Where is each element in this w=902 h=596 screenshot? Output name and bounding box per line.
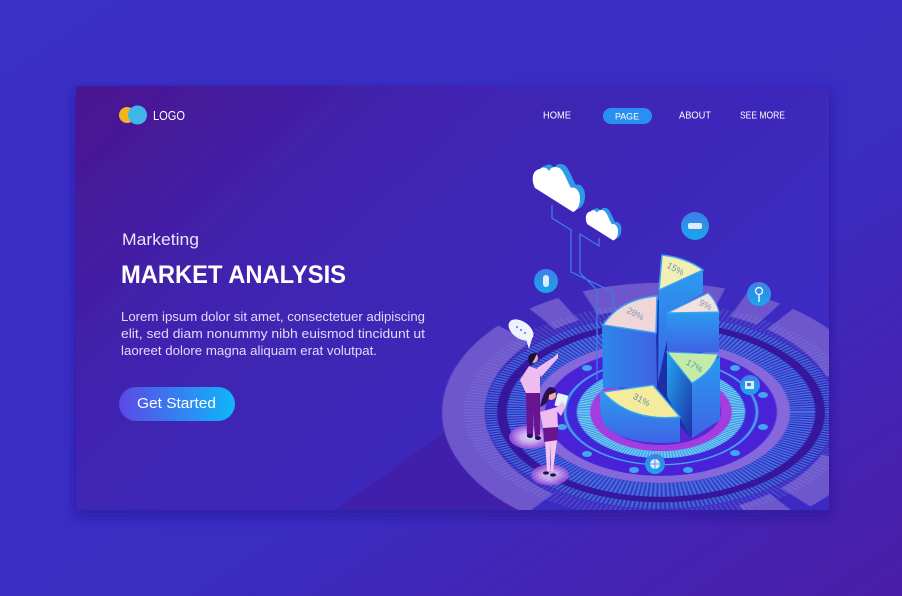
- title: MARKET ANALYSIS: [121, 261, 346, 289]
- pie chart: 9% slice: [667, 293, 719, 352]
- pie chart: 15% slice: 15%: [665, 260, 686, 278]
- button: get started: [119, 387, 235, 421]
- spotlight under man: [509, 425, 546, 449]
- navigation: [543, 108, 785, 124]
- body text: Lorem ipsum dolor sit amet, consectetuer adipiscing: [121, 310, 425, 324]
- pie chart: 17% slice: 17%: [684, 357, 705, 375]
- icon: mouse: [534, 269, 558, 293]
- pie chart: 28% slice: [602, 296, 657, 388]
- button: get started: Get Started: [137, 395, 216, 412]
- active nav pill: PAGE: [615, 112, 639, 122]
- panel: landing page card: [76, 86, 829, 510]
- circuit lines from clouds: [552, 205, 613, 380]
- body text: [121, 310, 426, 358]
- icon: small cloud: [586, 208, 621, 241]
- navigation: ABOUT: [679, 110, 711, 122]
- subheading: Marketing: [122, 231, 199, 249]
- icon: globe: [645, 454, 665, 474]
- icon: magnifier: [747, 282, 771, 306]
- ring dots: [557, 365, 768, 473]
- logo: [119, 106, 185, 124]
- navigation: HOME: [543, 110, 571, 122]
- logo: LOGO: [153, 109, 185, 123]
- icon: megaphone: [681, 212, 709, 240]
- body text: elit, sed diam nonummy nibh euismod tincidunt ut: [121, 327, 426, 341]
- speech bubble: [508, 319, 534, 349]
- pie chart: 9% slice: 9%: [697, 297, 714, 312]
- pie chart: 17% slice: [667, 352, 720, 438]
- icon: large cloud: [533, 164, 585, 212]
- active nav pill: [603, 108, 652, 124]
- outer segmented ring: [464, 295, 858, 529]
- figure: woman: [540, 387, 568, 477]
- concentric data rings: [474, 309, 848, 515]
- pie chart: shadow core: [655, 300, 692, 440]
- pie chart: 28% slice: 28%: [625, 305, 646, 323]
- figure: man: [520, 353, 558, 440]
- pie chart: 15% slice: [658, 255, 703, 383]
- spotlight under woman: [531, 464, 569, 486]
- icon: video: [740, 375, 760, 395]
- pie chart: 31% slice: [600, 385, 680, 443]
- illustration: isometric market analysis scene: [336, 164, 829, 510]
- navigation: SEE MORE: [740, 110, 785, 122]
- body text: laoreet dolore magna aliquam erat volutpat.: [121, 344, 377, 358]
- pie chart: 31% slice: 31%: [631, 391, 652, 409]
- floor shadow: [335, 432, 520, 510]
